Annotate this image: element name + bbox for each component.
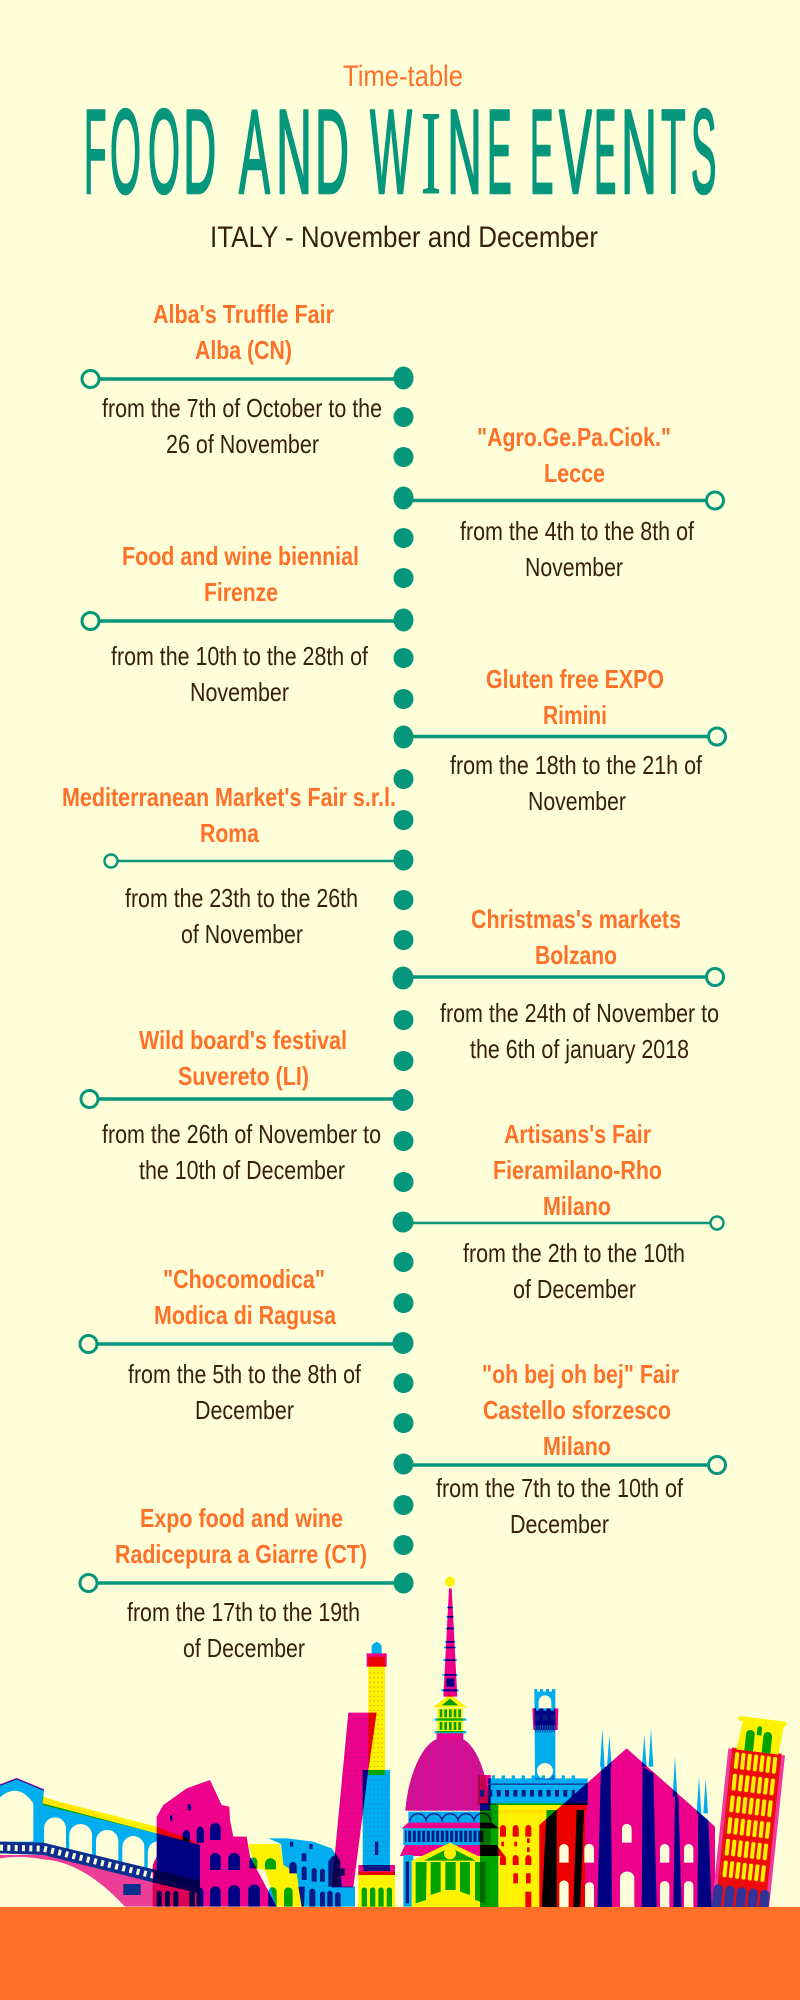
event: Alba's Truffle Fair: Alba's Truffle Fair [153,299,334,329]
title: Food and Wine Events: F [84,85,106,219]
text: S [691,85,716,219]
event: Mediterranean Market's Fair: Roma [200,818,259,848]
timeline: vertical dotted spine [392,366,414,1594]
icon: stepped ruin yellow and cyan arena [248,1838,355,1907]
event: Wild board's festival: Suvereto (LI) [178,1061,309,1091]
title: Food and Wine Events: N [276,85,312,219]
icon: Rialto bridge [0,1779,200,1907]
event: Agro.Ge.Pa.Ciok.: "Agro.Ge.Pa.Ciok." [477,422,671,452]
title: Food and Wine Events: D [315,85,349,219]
event: Gluten free EXPO: November [528,786,626,816]
icon: Mole Antonelliana [400,1577,505,1908]
title: Food and Wine Events: O [148,85,180,219]
event: Gluten free EXPO [407,664,726,816]
event: Food and wine biennial [82,541,400,707]
icon: Verona palace and tower [477,1689,588,1910]
event: Christmas's markets: Bolzano [535,940,617,970]
icon: Colosseum [43,1780,277,1907]
event: Chocomodica [80,1264,400,1425]
event: Alba's Truffle Fair: Alba (CN) [195,335,292,365]
event: Artisans's Fair: of December [513,1274,636,1304]
title: Food and Wine Events: W [370,85,412,219]
icon: Bologna towers [332,1642,395,1908]
event: Agro.Ge.Pa.Ciok.: from the 4th to the 8th of [460,516,695,546]
event: Expo food and wine: Radicepura a Giarre (CT) [115,1539,367,1569]
event: Chocomodica: from the 5th to the 8th of [128,1359,362,1389]
event: Agro.Ge.Pa.Ciok. [407,422,724,582]
title: Food and Wine Events [84,85,716,219]
event: oh bej oh bej: from the 7th to the 10th of [436,1473,684,1503]
event: Expo food and wine: of December [183,1633,305,1663]
event: Artisans's Fair: from the 2th to the 10th [463,1238,685,1268]
event: Artisans's Fair: Milano [543,1191,611,1221]
event: Gluten free EXPO: Gluten free EXPO [486,664,664,694]
event: Mediterranean Market's Fair: from the 23th to the 26th [125,883,358,913]
title: Food and Wine Events: E [487,85,512,219]
title: Food and Wine Events: E [530,85,554,219]
event: Expo food and wine: Expo food and wine [140,1503,343,1533]
event: Expo food and wine [80,1503,400,1663]
event: Artisans's Fair [407,1119,724,1304]
title: Food and Wine Events: T [661,85,686,219]
event: Christmas's markets: from the 24th of November to [440,998,719,1028]
event: Alba's Truffle Fair: from the 7th of October to the [102,393,382,423]
illustration: Italian monuments skyline [0,1576,787,1907]
event: Food and wine biennial: from the 10th to the 28th of [111,641,369,671]
event: Chocomodica: Modica di Ragusa [154,1300,336,1330]
event: Chocomodica: December [195,1395,294,1425]
event: Wild board's festival: from the 26th of November to [102,1119,381,1149]
event: Artisans's Fair: Fieramilano-Rho [493,1155,662,1185]
footer: orange band [0,1907,800,2000]
event: Agro.Ge.Pa.Ciok.: Lecce [544,458,605,488]
title: Food and Wine Events: N [621,85,657,219]
event: Wild board's festival: the 10th of December [139,1155,345,1185]
event: Wild board's festival [81,1025,400,1185]
event: Food and wine biennial: Food and wine biennial [122,541,359,571]
event: Food and wine biennial: Firenze [204,577,278,607]
event: oh bej oh bej: "oh bej oh bej" Fair [482,1359,679,1389]
event: Christmas's markets [407,904,724,1064]
event: Artisans's Fair: Artisans's Fair [504,1119,651,1149]
event: Christmas's markets: the 6th of january 2018 [470,1034,689,1064]
title: Food and Wine Events: I [421,86,441,219]
event: Christmas's markets: Christmas's markets [471,904,681,934]
icon: Milan cathedral [539,1728,715,1908]
event: Wild board's festival: Wild board's festival [139,1025,347,1055]
eyebrow: Time-table: Time-table [343,60,463,93]
event: oh bej oh bej: Milano [543,1431,611,1461]
title: Food and Wine Events: D [183,85,216,219]
event: Chocomodica: "Chocomodica" [163,1264,325,1294]
title: Food and Wine Events: N [447,85,482,219]
event: Expo food and wine: from the 17th to the 19th [127,1597,360,1627]
event: Mediterranean Market's Fair: of November [181,919,303,949]
event: oh bej oh bej: December [510,1509,609,1539]
event: Gluten free EXPO: from the 18th to the 21h of [450,750,703,780]
event: Food and wine biennial: November [190,677,289,707]
title: Food and Wine Events: E [594,85,616,219]
event: Gluten free EXPO: Rimini [543,700,607,730]
event: oh bej oh bej: Castello sforzesco [483,1395,671,1425]
event: Alba's Truffle Fair: 26 of November [166,429,319,459]
icon: Leaning Tower of Pisa [711,1715,788,1922]
title: Food and Wine Events: V [559,85,592,219]
event: Alba's Truffle Fair [82,299,400,459]
title: Food and Wine Events: A [239,85,270,219]
event: Mediterranean Market's Fair [62,782,400,949]
event: Mediterranean Market's Fair: Mediterranean Market's Fair s.r.l. [62,782,396,812]
event: Agro.Ge.Pa.Ciok.: November [525,552,623,582]
event: oh bej oh bej [407,1359,726,1539]
title: Food and Wine Events: O [110,85,141,219]
subtitle: Italy dates: ITALY - November and December [210,221,598,254]
